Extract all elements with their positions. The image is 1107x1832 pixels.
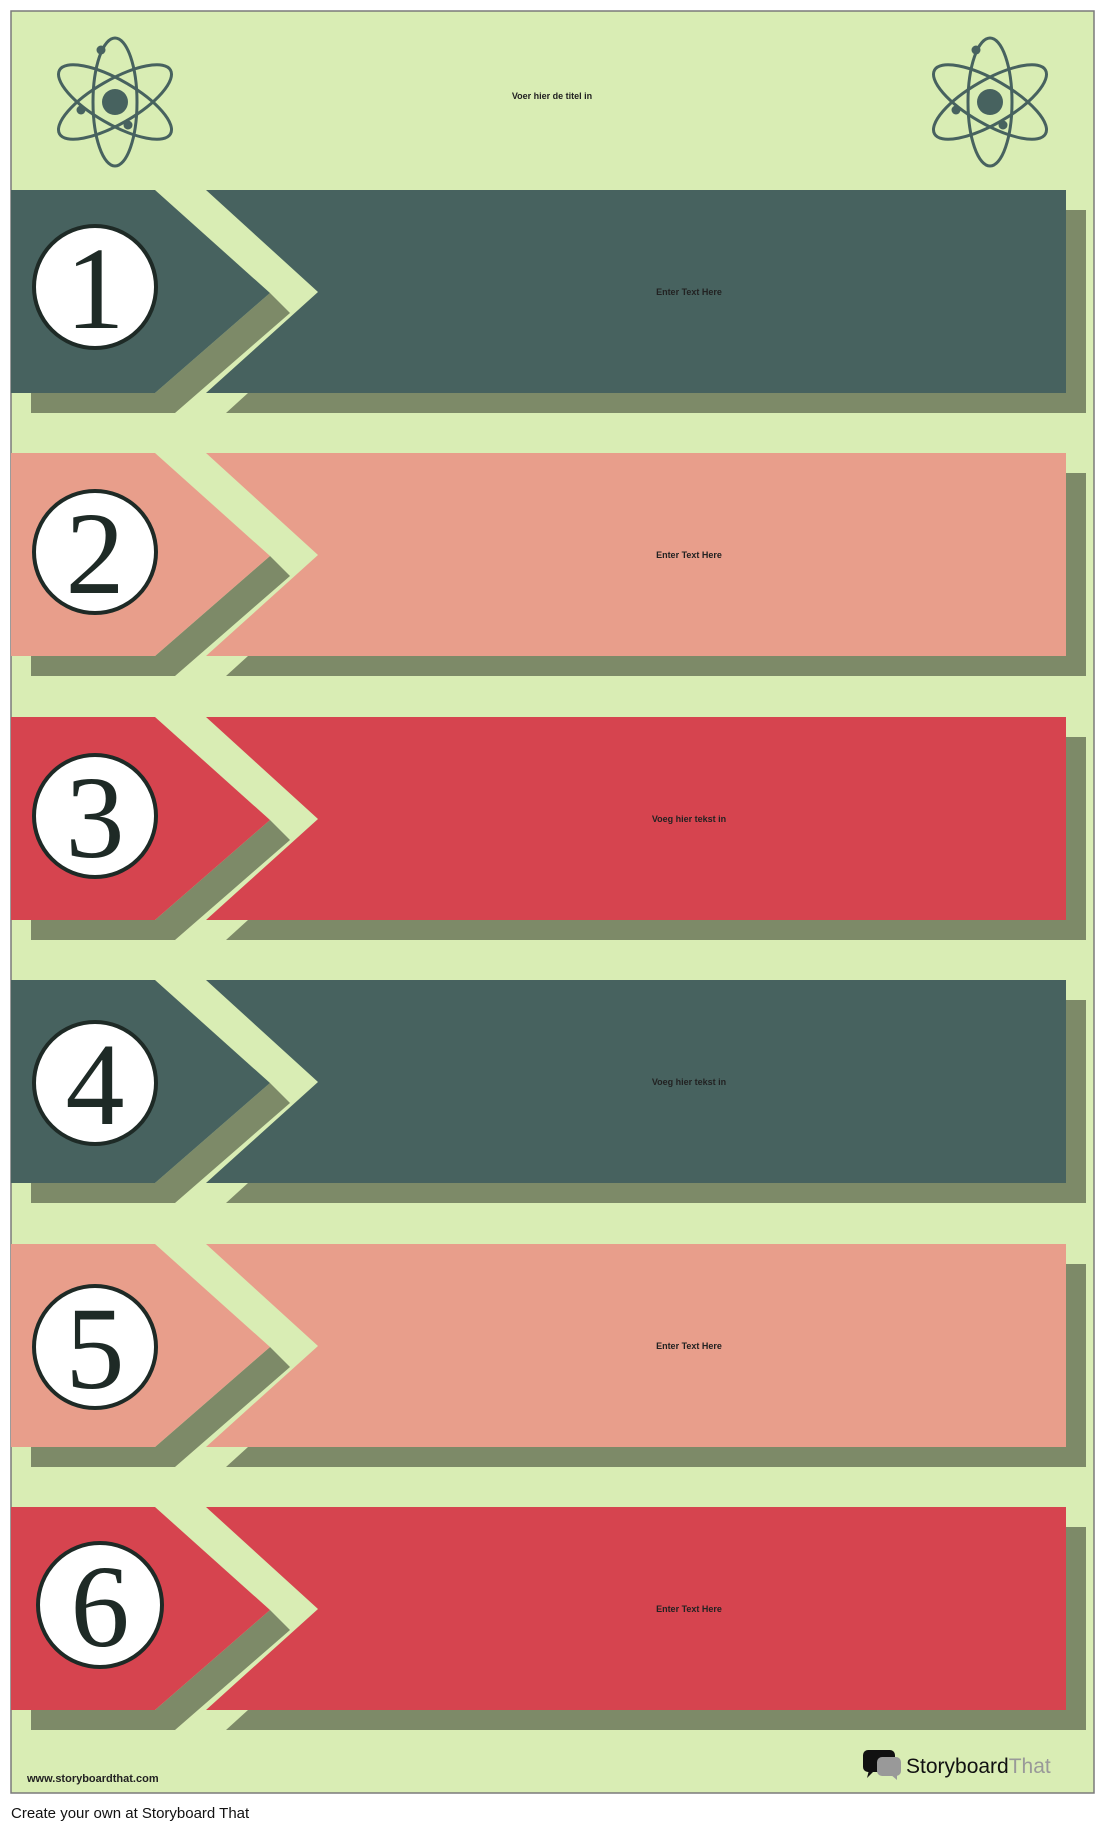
step 6: Enter Text Here (656, 1604, 722, 1614)
step 5: Enter Text Here (656, 1341, 722, 1351)
step 3: Voeg hier tekst in (652, 814, 726, 824)
step 6 (11, 1507, 1086, 1730)
title: Voer hier de titel in (512, 91, 592, 101)
step 2 (11, 453, 1086, 676)
step 1: Enter Text Here (656, 287, 722, 297)
step 2: Enter Text Here (656, 550, 722, 560)
step 4: Voeg hier tekst in (652, 1077, 726, 1087)
step 4: 4 (66, 1019, 124, 1150)
caption: Create your own at Storyboard That (11, 1805, 250, 1822)
step 3: 3 (66, 752, 124, 883)
icon: atom right (924, 38, 1056, 166)
icon: atom left (49, 38, 181, 166)
logo: storyboardthat (863, 1750, 1051, 1780)
footer url: www.storyboardthat.com (26, 1773, 159, 1785)
step 5: 5 (66, 1283, 124, 1414)
step 6: 6 (70, 1541, 130, 1672)
step 3 (11, 717, 1086, 940)
logo: storyboardthat: StoryboardThat (906, 1755, 1051, 1778)
step 1 (11, 190, 1086, 413)
step 2: 2 (66, 488, 124, 619)
step 4 (11, 980, 1086, 1203)
step 1: 1 (66, 223, 124, 354)
step 5 (11, 1244, 1086, 1467)
